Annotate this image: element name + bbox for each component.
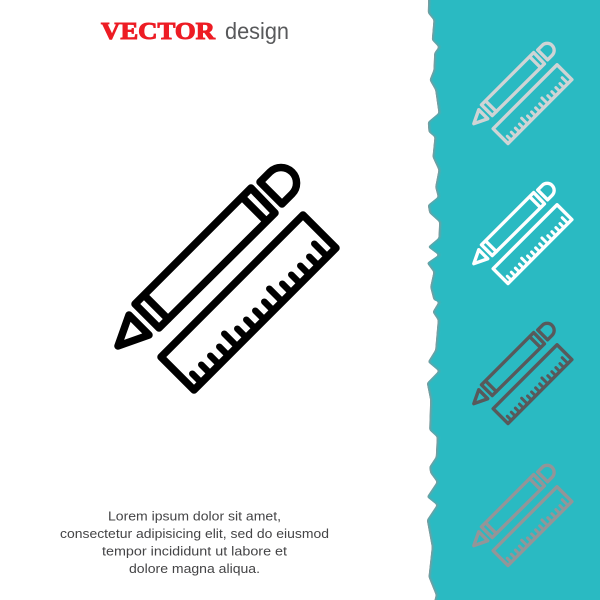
- panel: torn teal strip: [427, 0, 600, 600]
- title: VECTOR design: [101, 18, 289, 45]
- icon: mid grey pencil and ruler: [474, 465, 572, 566]
- title: VECTOR design: design: [225, 18, 289, 44]
- title: VECTOR design: VECTOR: [101, 19, 216, 45]
- icon: main pencil and ruler: [118, 167, 336, 390]
- icon: dark grey pencil and ruler: [474, 323, 572, 424]
- icon: light grey pencil and ruler: [474, 43, 572, 144]
- text block: lorem ipsum caption: [60, 508, 329, 576]
- text block: lorem ipsum caption: Lorem ipsum dolor sit amet,: [108, 508, 281, 524]
- icon: white pencil and ruler: [474, 183, 572, 284]
- text block: lorem ipsum caption: tempor incididunt ut labore et: [102, 544, 287, 558]
- text block: lorem ipsum caption: dolore magna aliqua.: [129, 561, 260, 576]
- text block: lorem ipsum caption: consectetur adipisicing elit, sed do eiusmod: [60, 526, 329, 541]
